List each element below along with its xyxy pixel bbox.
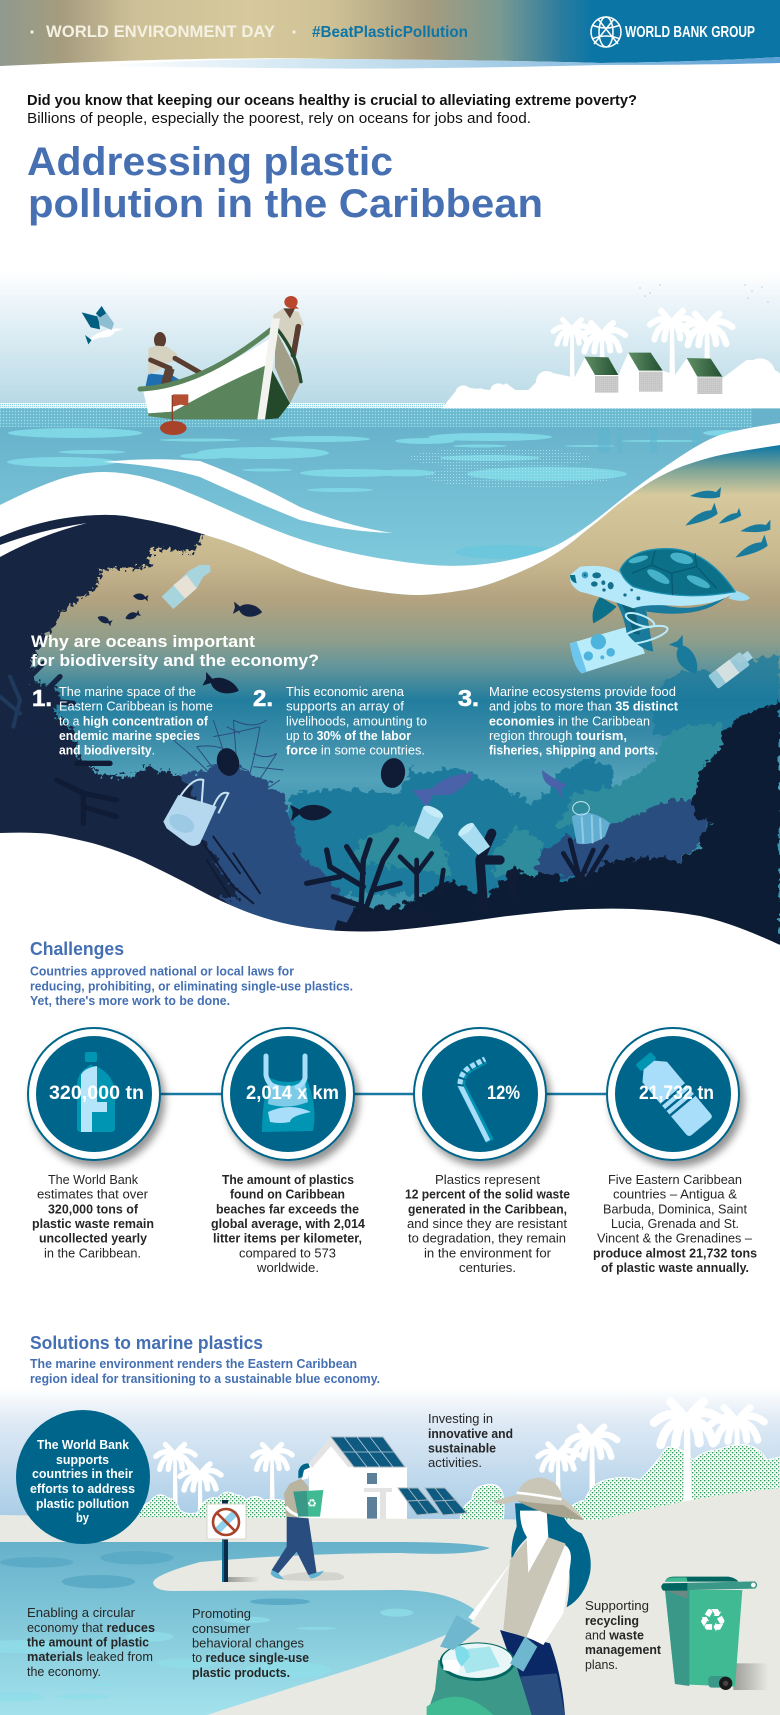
callout: World Bank circle: supports [56,1452,109,1467]
stat text 2: found on Caribbean [230,1187,345,1202]
stat text 3: 12 percent of the solid waste [405,1187,570,1202]
text: recycling: recycling [585,1613,639,1628]
solutions intro text [30,1357,380,1386]
stat circle: 320,000 tn: 320,000 tn [49,1083,144,1104]
stat circle: 21,732 tn: 21,732 tn [639,1083,714,1104]
callout: World Bank circle: by [76,1510,90,1525]
challenges intro text: reducing, prohibiting, or eliminating single-use plastics. [30,979,353,993]
stat text 4: Lucia, Grenada and St. [611,1216,739,1231]
stat text 1: uncollected yearly [39,1231,148,1246]
solutions intro text: The marine environment renders the Eastern Caribbean [30,1357,357,1371]
icon: detergent bottle [77,1052,115,1132]
stat text 2 [211,1172,366,1275]
challenges intro text: Yet, there's more work to be done. [30,994,230,1008]
stat text 4: Barbuda, Dominica, Saint [603,1201,747,1216]
title: pollution in the Caribbean [28,182,543,226]
icon: no plastic sign [207,1500,260,1582]
text: behavior change: consumer [192,1621,251,1636]
point 1: The marine space of the [59,684,196,699]
stat text 3: generated in the Caribbean, [408,1201,567,1216]
section heading: challenges: Challenges [30,939,124,959]
point 1: to a high concentration of [59,713,209,728]
plastic cup 2 [456,821,490,855]
illustration: right dark reef mass [353,700,780,960]
illustration: shore sky and background [0,1388,780,1525]
illustration: land and water [0,1488,780,1715]
point 3: Marine ecosystems provide food [489,684,676,699]
point 2: force in some countries. [286,743,425,758]
illustration: reef, dark left silhouette [0,514,234,907]
callout: World Bank circle: plastic pollution [36,1496,129,1511]
point 2 [253,684,427,758]
vest [503,1537,565,1643]
plastic bottle right [708,648,755,689]
face mask [572,802,610,844]
stat text 2: global average, with 2,014 [211,1216,366,1231]
stat text 1 [32,1172,154,1260]
icon: seagull [82,306,123,344]
text: investing [428,1411,513,1470]
point 3 [458,684,679,758]
text: recycling: Supporting [585,1598,649,1613]
point 1: and biodiversity. [59,743,155,758]
stat text 1: The World Bank [48,1172,138,1187]
stat circle: 12%: 12% [487,1083,520,1104]
title [27,140,543,226]
stat circle: 320,000 tn [28,1028,160,1160]
point 3: region through tourism, [489,728,627,743]
intro text: Did you know that keeping our oceans healthy is crucial to alleviating extreme poverty? [27,92,637,109]
intro text: Billions of people, especially the poorest, rely on oceans for jobs and food. [27,110,531,127]
stat text 2: worldwide. [256,1260,319,1275]
heading: why oceans: Why are oceans important [31,633,256,651]
challenges intro text [30,965,353,1008]
point 3: and jobs to more than 35 distinct [489,699,679,714]
stat text 4: produce almost 21,732 tons [593,1245,757,1260]
illustration: turtle with plastic [570,549,750,673]
text: investing: sustainable [428,1441,496,1456]
hair [511,1503,591,1607]
section: why oceans important [31,633,679,758]
stat text 3: and since they are resistant [407,1216,567,1231]
trash bag with plastics [427,1660,532,1715]
illustration: fish purple and blue [412,770,567,815]
stat text 2: The amount of plastics [222,1172,354,1187]
stat text 3: to degradation, they remain [408,1231,566,1246]
stat text 2: beaches far exceeds the [216,1201,359,1216]
face and neck [520,1511,548,1573]
text: investing: Investing in [428,1411,493,1426]
point 3: 3. [458,685,479,711]
illustration: woman collecting plastic [427,1477,591,1715]
stat text 3 [405,1172,570,1275]
point 1: 1. [32,685,52,711]
stat circle: 2,014 x km: 2,014 x km [246,1083,339,1104]
text: investing: activities. [428,1455,482,1470]
illustration: small fish, upper water [96,592,263,626]
icon: drinking straw [460,1059,490,1141]
text: circular economy: Enabling a circular [27,1605,136,1620]
plastic cup on flipper [570,625,645,673]
illustration: island with houses and palms [442,311,780,408]
icon: recycling bin: ♻ [698,1603,727,1639]
boat hull [140,318,302,419]
text: behavior change [192,1606,309,1680]
text: circular economy: the economy. [27,1664,101,1679]
gloves [440,1615,480,1650]
stat text 1: plastic waste remain [32,1216,154,1231]
text: behavior change: plastic products. [192,1665,290,1680]
house with solar roof [309,1437,407,1519]
trousers [500,1630,565,1715]
standing fisherman [273,296,304,355]
text: recycling: management [585,1642,662,1657]
callout: World Bank circle: The World Bank [37,1437,130,1452]
illustration: plastic bottle floating [162,565,211,609]
stat text 4: Vincent & the Grenadines – [597,1231,753,1246]
header banner [0,0,780,69]
section heading: solutions: Solutions to marine plastics [30,1333,263,1353]
stat circle: 2,014 x km [222,1028,354,1160]
point 2: livelihoods, amounting to [286,713,427,728]
text: recycling: and waste [585,1628,644,1643]
illustration: man carrying recycling box: ♻ [307,1498,317,1510]
point 3: economies in the Caribbean [489,713,650,728]
illustration: ocean surface scene [0,272,780,603]
logo: World Bank Group [591,17,755,47]
sea ripples [7,428,747,492]
point 2: supports an array of [286,699,404,714]
stat text 4: of plastic waste annually. [601,1260,749,1275]
stat text 2: litter items per kilometer, [213,1231,362,1246]
stat text 1: estimates that over [37,1187,149,1202]
callout: World Bank circle: efforts to address [30,1481,135,1496]
seated fisherman [145,332,200,387]
header: event name: WORLD ENVIRONMENT DAY [46,23,275,41]
connector line between stat circles [94,1093,673,1095]
callout: World Bank circle: countries in their [32,1466,133,1481]
stat text 3: Plastics represent [435,1172,540,1187]
text: circular economy: the amount of plastic [27,1634,149,1650]
point 1: endemic marine species [59,728,200,743]
illustration: foreground coral [307,840,433,933]
solutions intro text: region ideal for transitioning to a sustainable blue economy. [30,1372,380,1386]
arms [527,1545,571,1645]
text: recycling: plans. [585,1657,618,1672]
icon: plastic bag [262,1056,314,1132]
illustration: underwater background [0,445,780,960]
plastic cup 1 [414,803,445,839]
header: hashtag: #BeatPlasticPollution [312,24,468,41]
heading: why oceans [31,633,319,670]
hat [493,1477,584,1520]
palms on shore [156,1408,764,1525]
point 1: Eastern Caribbean is home [59,699,213,714]
stat text 4 [593,1172,757,1275]
intro text [27,92,637,127]
title: Addressing plastic [27,140,393,184]
stat text 3: in the environment for [424,1245,552,1260]
icon: plastic bottle [631,1048,713,1137]
illustration: reef plastics, cups, mask, bottle [414,648,755,855]
text: recycling [585,1598,662,1672]
stat text 1: 320,000 tons of [48,1201,139,1216]
illustration: fisherman boat [140,296,304,435]
point 2: 2. [253,685,273,711]
stat text 3: centuries. [459,1260,516,1275]
ground solar panels [398,1488,467,1515]
illustration: reef left blue layer [0,663,353,937]
lower white wave [0,833,780,970]
illustration: plastic bag [163,780,228,846]
stippled bushes [137,1445,780,1520]
point 1 [32,684,213,758]
stat text 4: Five Eastern Caribbean [608,1172,742,1187]
text: behavior change: to reduce single-use [192,1650,309,1665]
buoy with flag [160,394,188,435]
illustration: reef background layers right [290,653,780,893]
illustration: reef fish dark [201,672,407,820]
text: circular economy [27,1605,155,1679]
stat text 4: countries – Antigua & [613,1187,737,1202]
challenges intro text: Countries approved national or local laws for [30,965,294,979]
text: circular economy: economy that reduces [27,1620,155,1635]
text: circular economy: materials leaked from [27,1649,153,1664]
callout: World Bank circle [16,1410,150,1544]
illustration: white wave sliver [103,459,393,533]
stat text 1: in the Caribbean. [44,1245,141,1260]
stat circle: 12% [414,1028,546,1160]
point 3: fisheries, shipping and ports. [489,743,658,758]
illustration: sliver in dark silhouette [0,523,87,557]
point 2: This economic arena [286,684,405,699]
illustration: teal fish silhouette [668,635,703,678]
point 2: up to 30% of the labor [286,728,411,743]
stat circle: 21,732 tn [607,1028,739,1160]
illustration: fish school, teal [681,487,771,560]
heading: why oceans: for biodiversity and the economy? [31,652,319,670]
text: investing: innovative and [428,1426,513,1441]
text: behavior change: behavioral changes [192,1636,304,1651]
illustration: man carrying recycling box [271,1463,344,1581]
icon: recycling bin [661,1577,768,1690]
illustration: white wave [0,423,780,595]
text: behavior change: Promoting [192,1606,251,1621]
stat text 2: compared to 573 [239,1245,336,1260]
